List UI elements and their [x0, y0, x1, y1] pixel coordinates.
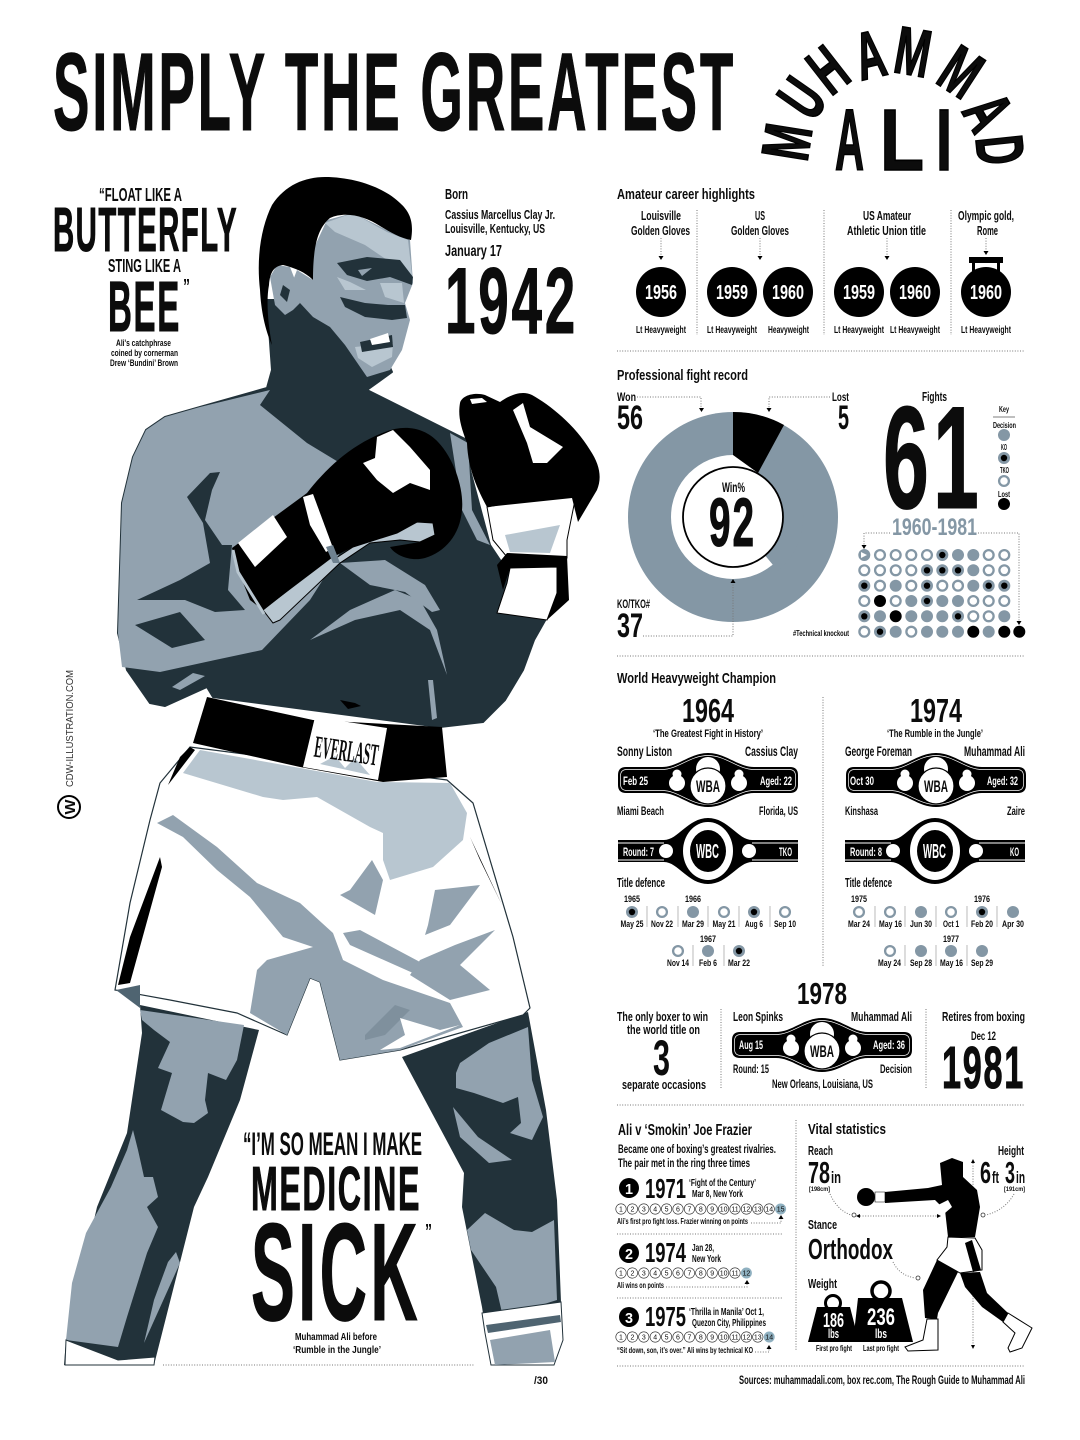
column: 1974: Kinshasa: [845, 804, 878, 818]
WBC belt: KO: [1010, 845, 1019, 859]
panel: amateur career highlights: Athletic Union title: [847, 223, 926, 238]
left glove: [232, 428, 462, 623]
born: Born: [445, 186, 468, 203]
title defences: May 16: [940, 958, 963, 969]
round markers: 2: [630, 1270, 634, 1278]
quote: medicine sick: “I’M SO MEAN I MAKE: [243, 1126, 422, 1162]
title defences: [620, 894, 796, 969]
title defences: Aug 6: [745, 919, 763, 930]
WBA belt: [618, 753, 798, 807]
title defences: Oct 1: [943, 919, 959, 930]
quote: medicine sick: Muhammad Ali before: [295, 1332, 377, 1343]
heading: Vital statistics: [808, 1121, 886, 1138]
panel: professional fight record: 5: [838, 399, 849, 437]
icon: weight 186 lbs: [808, 1296, 859, 1342]
fight 2: 1974: [616, 1237, 783, 1298]
donut chart: Win%: [722, 479, 745, 495]
year medals: [636, 257, 1011, 317]
quote: float like a butterfly: [53, 185, 238, 368]
column: 1964: Cassius Clay: [745, 743, 798, 759]
round markers: 5: [665, 1206, 669, 1214]
round markers: 4: [653, 1334, 657, 1342]
Muhammad Ali arched logotype: A: [948, 81, 1027, 144]
retirement callout: Retires from boxing: [942, 1009, 1025, 1024]
fights total: [883, 376, 983, 539]
Muhammad Ali arched logotype: I: [936, 92, 952, 189]
column: 1964: ‘The Greatest Fight in History’: [653, 728, 763, 740]
reach: Reach: [808, 1143, 833, 1158]
year medals: 1959: [843, 282, 875, 304]
panel: amateur career highlights: Golden Gloves: [731, 223, 789, 238]
round markers: 8: [699, 1334, 703, 1342]
round markers: 1: [619, 1206, 623, 1214]
credit: CDW illustration: [58, 670, 80, 818]
only boxer callout: 3: [653, 1030, 670, 1086]
heading: World Heavyweight Champion: [617, 670, 776, 687]
Muhammad Ali arched logotype: D: [961, 132, 1038, 168]
round markers: 6: [676, 1270, 680, 1278]
round markers: 7: [687, 1270, 691, 1278]
panel: amateur career highlights: US Amateur: [863, 208, 911, 223]
text: BUTTERFLY: [53, 196, 238, 265]
round markers: 10: [720, 1270, 728, 1278]
WBA belt: Aug 15: [739, 1038, 763, 1052]
WBC belt: [618, 818, 798, 884]
heading: Professional fight record: [617, 367, 748, 384]
Muhammad Ali arched logotype: H: [794, 32, 863, 109]
Muhammad Ali arched logotype: A: [848, 16, 893, 95]
column: 1964: Miami Beach: [617, 804, 664, 818]
weights: Weight: [808, 1276, 837, 1291]
icon: weight 236 lbs: lbs: [875, 1326, 887, 1341]
key: Key: [999, 405, 1009, 414]
panel: 1978 title: 1978: [797, 976, 847, 1011]
panel: amateur career highlights: Rome: [977, 223, 998, 238]
panel: professional fight record: KO/TKO#: [617, 597, 650, 611]
round markers: 12: [743, 1334, 750, 1342]
icon: weight 236 lbs: 236: [867, 1304, 895, 1331]
round markers: 12: [743, 1206, 750, 1214]
fight 3: 1975: 3: [625, 1310, 633, 1327]
year medals: 1959: [716, 282, 748, 304]
fight 3: 1975: “Sit down, son, it’s over.” Ali wins by technical KO: [617, 1346, 753, 1355]
head and face: [259, 177, 413, 377]
panel: vital statistics: [808, 1121, 1032, 1353]
round markers: 12: [743, 1270, 750, 1278]
title defences: 1976: [974, 894, 990, 904]
WBA belt: WBA: [924, 777, 948, 796]
panel: 1978 title: Decision: [880, 1062, 912, 1076]
title defences: Nov 14: [667, 958, 690, 969]
panel: professional fight record: Won: [617, 390, 636, 404]
title defences: Sep 28: [910, 958, 932, 969]
boxing shorts: [115, 697, 530, 1060]
fight 1: 1971: Ali’s first pro fight loss. Frazier winning on points: [617, 1217, 748, 1226]
fights total: Fights: [922, 389, 947, 404]
round markers: 11: [731, 1270, 739, 1278]
panel: professional fight record: 56: [617, 399, 643, 437]
WBC belt: TKO: [779, 845, 792, 859]
WBA belt: Feb 25: [623, 774, 648, 788]
born: Cassius Marcellus Clay Jr.: [445, 207, 555, 222]
title defences: Mar 24: [848, 919, 871, 930]
panel: professional fight record: Lost: [832, 390, 849, 404]
title defences: May 16: [879, 919, 902, 930]
round markers: [616, 1332, 774, 1342]
panel: professional fight record: 1960-1981: [892, 514, 977, 541]
title defences: May 21: [712, 919, 736, 930]
Muhammad Ali arched logotype: A: [835, 92, 864, 189]
round markers: 10: [720, 1334, 728, 1342]
column: 1964: Title defence: [617, 875, 665, 890]
WBC belt: Round: 7: [623, 845, 654, 859]
round markers: [616, 1204, 786, 1214]
title defences: Nov 22: [651, 919, 673, 930]
fight 1: 1971: 1971: [645, 1173, 686, 1204]
Everlast label: [303, 717, 387, 780]
round markers: 14: [765, 1334, 773, 1342]
fight 2: 1974: 1974: [645, 1237, 686, 1268]
only boxer callout: separate occasions: [622, 1077, 706, 1092]
donut chart: [628, 412, 838, 622]
title defences: Mar 29: [682, 919, 704, 930]
title defences: 1977: [943, 934, 959, 944]
reach: [198cm]: [809, 1186, 830, 1193]
WBC belt: WBC: [923, 841, 946, 863]
round markers: 1: [619, 1334, 623, 1342]
quote: medicine sick: SICK: [251, 1195, 421, 1350]
reach: 78: [808, 1155, 830, 1190]
round markers: 2: [630, 1334, 634, 1342]
panel: amateur career highlights: Lt Heavyweight: [890, 325, 940, 336]
panel: professional fight record: #Technical knockout: [793, 629, 849, 638]
title defences: 1967: [700, 934, 716, 944]
credit: CDW illustration: W: [62, 799, 79, 814]
column: 1964: [617, 692, 798, 969]
round markers: 10: [720, 1206, 728, 1214]
retirement callout: Dec 12: [971, 1029, 996, 1043]
panel: 1978 title: Muhammad Ali: [851, 1009, 912, 1024]
year medals: 1960: [899, 282, 931, 304]
round markers: 6: [676, 1206, 680, 1214]
round markers: 13: [754, 1206, 762, 1214]
WBC belt: [845, 818, 1025, 884]
column: 1974: George Foreman: [845, 743, 912, 759]
fight 2: 1974: New York: [692, 1254, 721, 1265]
fight 3: 1975: [616, 1301, 774, 1355]
height: 3: [1005, 1155, 1015, 1190]
WBA belt: Aged: 22: [760, 774, 792, 788]
legs: [64, 1005, 563, 1365]
round markers: 2: [630, 1206, 634, 1214]
born: Louisville, Kentucky, US: [445, 221, 545, 236]
stance: Orthodox: [808, 1234, 893, 1266]
column: 1974: Muhammad Ali: [964, 743, 1025, 759]
fight 2: 1974: Ali wins on points: [617, 1281, 664, 1290]
panel: amateur career highlights: Lt Heavyweight: [834, 325, 884, 336]
title defences: May 24: [878, 958, 902, 969]
WBA belt: WBA: [696, 777, 720, 796]
icon: boxer silhouette: [857, 1158, 1032, 1352]
fight 2: 1974: Jan 28,: [692, 1243, 714, 1254]
title defences: May 25: [620, 919, 644, 930]
panel: amateur career highlights: Heavyweight: [768, 325, 809, 336]
round markers: 3: [642, 1334, 646, 1342]
fight 3: 1975: ‘Thrilla in Manila’ Oct 1,: [689, 1307, 764, 1318]
height: [191cm]: [1004, 1186, 1025, 1193]
Muhammad Ali arched logotype: U: [763, 65, 841, 132]
WBC belt: Round: 8: [850, 845, 882, 859]
fight 1: 1971: Mar 8, New York: [692, 1189, 743, 1200]
fight 3: 1975: 1975: [645, 1301, 686, 1332]
heading: Amateur career highlights: [617, 186, 755, 203]
quote: float like a butterfly: “FLOAT LIKE A: [99, 185, 182, 205]
quote: medicine sick: [243, 1126, 432, 1356]
fight 1: 1971: [616, 1173, 786, 1234]
round markers: 3: [642, 1206, 646, 1214]
column: 1974: 1974: [910, 692, 962, 729]
year medals: 1960: [970, 282, 1002, 304]
column: 1974: Zaire: [1007, 804, 1025, 818]
round markers: 11: [731, 1206, 739, 1214]
round markers: 8: [699, 1206, 703, 1214]
key: TKO: [1000, 466, 1009, 475]
illustration: Ali in boxing stance: [64, 177, 600, 1365]
page number: /30: [534, 1375, 548, 1387]
panel: amateur career highlights: Lt Heavyweight: [707, 325, 757, 336]
key: Lost: [998, 490, 1010, 499]
only boxer callout: The only boxer to win: [617, 1009, 708, 1024]
reach: [808, 1143, 941, 1218]
key: Decision: [993, 421, 1016, 430]
round markers: 9: [710, 1206, 714, 1214]
round markers: 15: [777, 1206, 785, 1214]
fights total: 61: [883, 376, 983, 539]
icon: weight 186 lbs: 186: [823, 1310, 844, 1332]
round markers: 11: [731, 1334, 739, 1342]
credit: CDW illustration: CDW-ILLUSTRATION.COM: [65, 670, 76, 787]
round markers: 7: [687, 1334, 691, 1342]
panel: Ali v Frazier: The pair met in the ring three times: [618, 1156, 750, 1170]
fight 1: 1971: ‘Fight of the Century’: [689, 1178, 756, 1189]
round markers: 9: [710, 1270, 714, 1278]
key: [993, 405, 1016, 510]
WBA belt: WBA: [810, 1042, 834, 1061]
weights: First pro fight: [816, 1344, 852, 1353]
quote: float like a butterfly: ”: [183, 276, 190, 298]
Muhammad Ali arched logotype: M: [889, 13, 937, 92]
height: [971, 1143, 1025, 1349]
panel: amateur career highlights: Lt Heavyweight: [961, 325, 1011, 336]
quote: medicine sick: ‘Rumble in the Jungle’: [293, 1345, 381, 1356]
round markers: 13: [754, 1334, 762, 1342]
stance: [808, 1217, 920, 1280]
Muhammad Ali arched logotype: L: [880, 92, 924, 189]
height: Height: [998, 1143, 1024, 1158]
column: 1974: ‘The Rumble in the Jungle’: [887, 728, 983, 740]
WBA belt: [846, 753, 1026, 807]
height: 6: [980, 1155, 991, 1190]
column: 1974: [845, 692, 1026, 969]
Muhammad Ali arched logotype: [748, 13, 1038, 189]
panel: amateur career highlights: Golden Gloves: [631, 223, 690, 238]
column: 1964: 1964: [682, 692, 734, 729]
panel: 1978 title: [617, 976, 1025, 1105]
WBA belt: Aged: 32: [987, 774, 1018, 788]
panel: amateur career highlights: Louisville: [641, 208, 681, 223]
torso and right arm: [118, 300, 547, 727]
round markers: 6: [676, 1334, 680, 1342]
column: 1974: Title defence: [845, 875, 892, 890]
WBA belt: [732, 1018, 912, 1072]
quote: float like a butterfly: Drew ‘Bundini’ Brown: [110, 358, 178, 368]
fight 3: 1975: Quezon City, Philippines: [692, 1318, 766, 1329]
title defences: Sep 29: [971, 958, 993, 969]
fight 2: 1974: 2: [625, 1246, 633, 1263]
icon: weight 236 lbs: [853, 1282, 913, 1342]
only boxer callout: [617, 1009, 708, 1092]
quote: medicine sick: ”: [425, 1221, 432, 1243]
WBA belt: Aged: 36: [873, 1038, 905, 1052]
WBA belt: Oct 30: [850, 774, 874, 788]
born: [445, 186, 578, 353]
quote: float like a butterfly: STING LIKE A: [108, 256, 181, 276]
weights: Last pro fight: [863, 1344, 899, 1353]
born: 1942: [445, 248, 578, 353]
round markers: 3: [642, 1270, 646, 1278]
key: KO: [1001, 443, 1007, 452]
panel: amateur career highlights: Olympic gold,: [958, 208, 1014, 223]
column: 1964: Florida, US: [759, 804, 798, 818]
title defences: 1975: [851, 894, 867, 904]
quote: float like a butterfly: Ali's catchphrase: [116, 338, 171, 348]
panel: 1978 title: Round: 15: [733, 1062, 769, 1076]
panel: amateur career highlights: Lt Heavyweight: [636, 325, 686, 336]
quote: medicine sick: MEDICINE: [251, 1155, 421, 1224]
height: in: [1016, 1168, 1025, 1187]
round markers: 5: [665, 1334, 669, 1342]
title defences: Apr 30: [1002, 919, 1024, 930]
year medals: 1960: [772, 282, 804, 304]
title defences: Feb 6: [699, 958, 717, 969]
fight 1: 1971: 1: [625, 1181, 633, 1198]
born: January 17: [445, 243, 502, 260]
reach: in: [831, 1168, 841, 1187]
year medals: 1956: [645, 282, 677, 304]
panel: 1978 title: New Orleans, Louisiana, US: [772, 1077, 873, 1091]
stance: Stance: [808, 1217, 837, 1232]
round markers: 4: [653, 1206, 657, 1214]
right glove: [459, 393, 600, 620]
waistband: [193, 697, 447, 782]
panel: Ali v Frazier: Became one of boxing’s greatest rivalries.: [618, 1142, 776, 1156]
panel: amateur career highlights: [617, 186, 1025, 351]
panel: 1978 title: Leon Spinks: [733, 1009, 783, 1024]
fight-by-fight dot grid: [858, 549, 1025, 638]
quote: float like a butterfly: coined by cornerman: [111, 348, 178, 358]
round markers: 9: [710, 1334, 714, 1342]
weights: [808, 1276, 913, 1353]
donut chart: 92: [709, 484, 756, 561]
title defences: Mar 22: [728, 958, 750, 969]
column: 1964: Sonny Liston: [617, 743, 672, 759]
panel: professional fight record: 37: [617, 607, 643, 645]
panel: amateur career highlights: US: [755, 208, 765, 223]
round markers: 1: [619, 1270, 623, 1278]
WBC belt: WBC: [696, 841, 719, 863]
round markers: [616, 1268, 752, 1278]
title defences: 1965: [624, 894, 640, 904]
heading: Ali v ‘Smokin’ Joe Frazier: [618, 1122, 752, 1139]
title defences: Feb 20: [971, 919, 993, 930]
Muhammad Ali arched logotype: M: [748, 119, 827, 165]
panel: world heavyweight champion: [617, 670, 1026, 969]
height: ft: [992, 1168, 999, 1187]
quote: float like a butterfly: BEE: [108, 268, 181, 347]
round markers: 4: [653, 1270, 657, 1278]
retirement callout: [942, 1009, 1025, 1101]
title defences: 1966: [685, 894, 701, 904]
boxing shorts: EVERLAST: [312, 729, 381, 772]
round markers: 5: [665, 1270, 669, 1278]
Muhammad Ali arched logotype: M: [926, 31, 996, 113]
round markers: 7: [687, 1206, 691, 1214]
panel: professional fight record: [617, 367, 1025, 656]
only boxer callout: the world title on: [627, 1022, 700, 1037]
panel: Ali v Frazier: [616, 1120, 796, 1355]
round markers: 8: [699, 1270, 703, 1278]
round markers: 14: [765, 1206, 773, 1214]
title defences: Sep 10: [774, 919, 796, 930]
icon: weight 186 lbs: lbs: [828, 1326, 839, 1341]
title defences: [848, 894, 1024, 969]
title defences: Jun 30: [910, 919, 932, 930]
